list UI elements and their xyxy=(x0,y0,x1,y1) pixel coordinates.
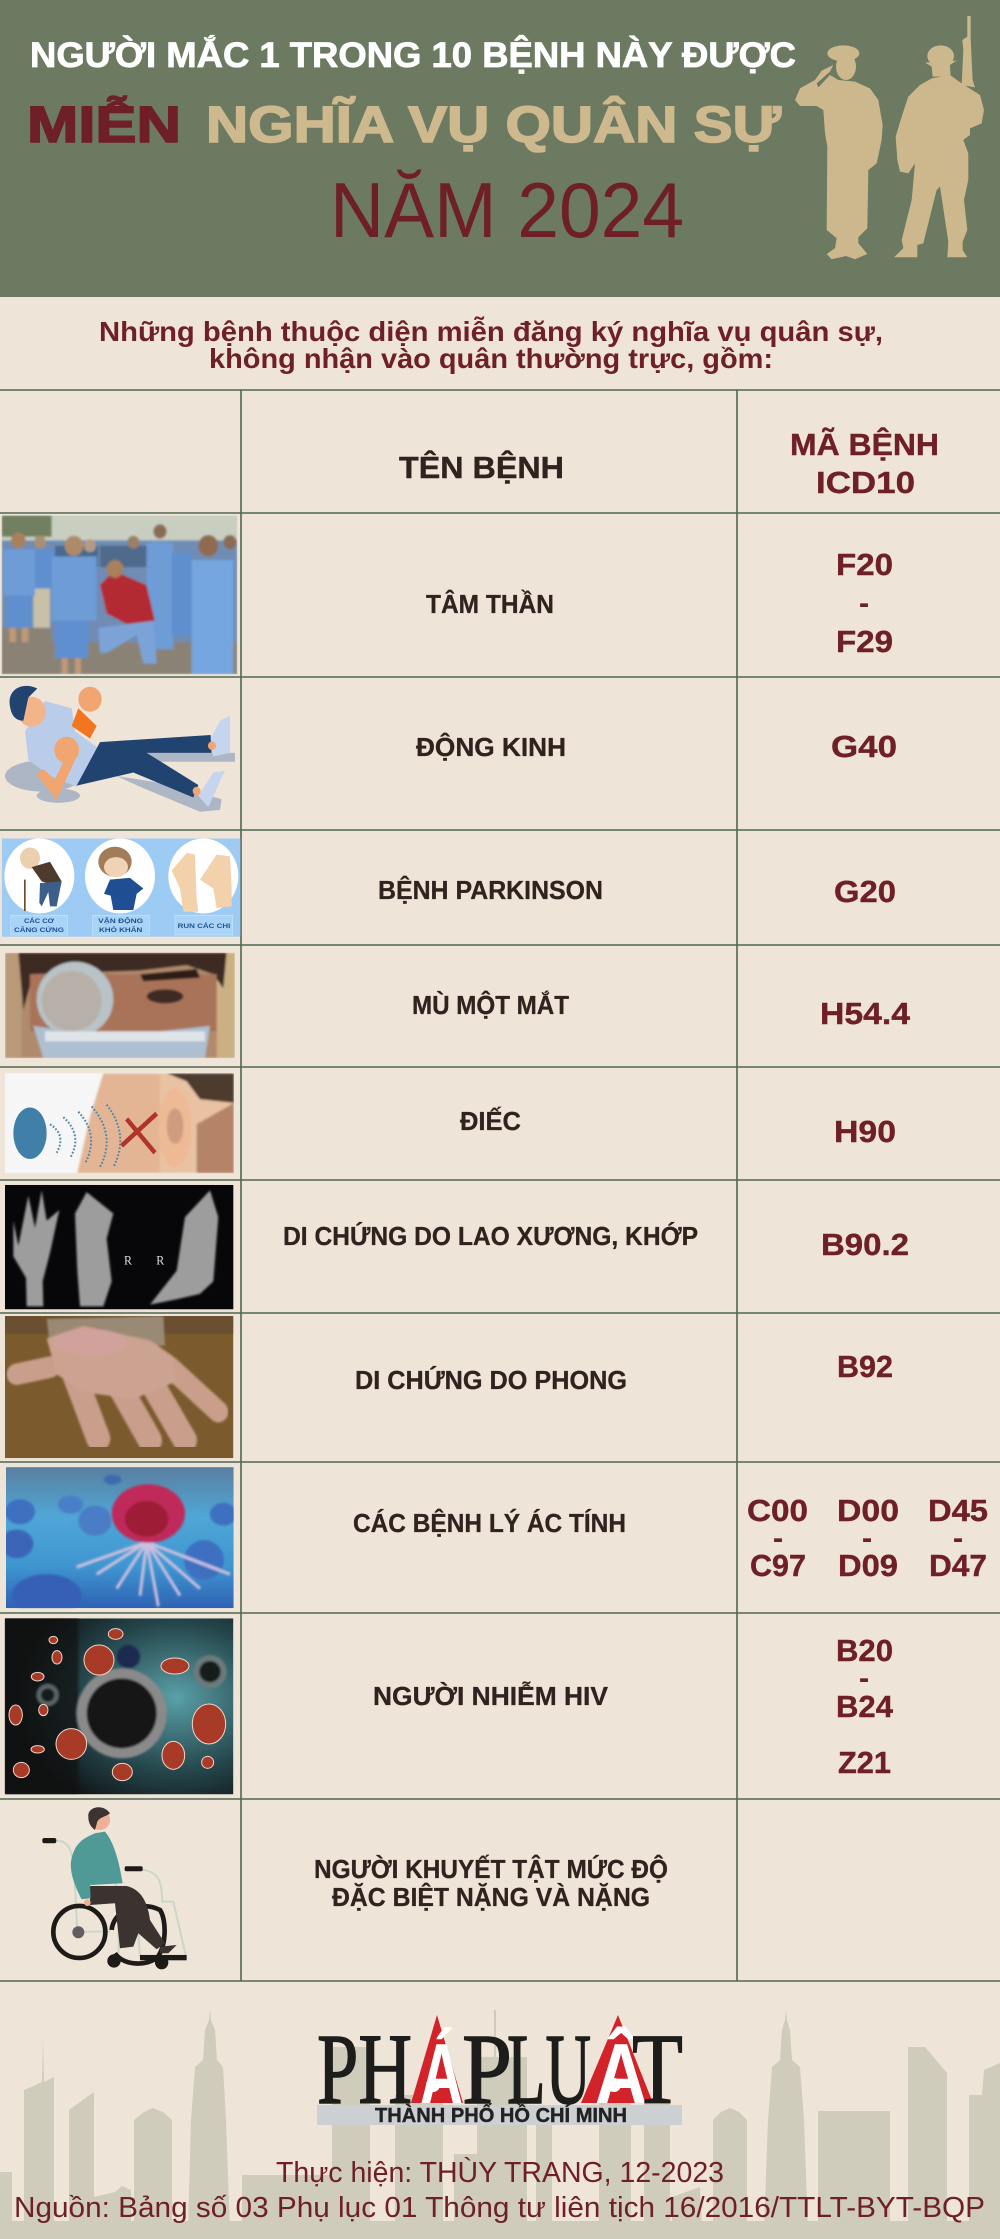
row 9 codes xyxy=(836,1633,894,1780)
image: Parkinson symptoms: CĂNG CỨNG xyxy=(14,925,64,934)
row 8 codes: - xyxy=(773,1520,783,1555)
row 5 code: H90 xyxy=(834,1114,896,1149)
row 6 code: B90.2 xyxy=(821,1227,909,1262)
panel: header banner xyxy=(0,0,1000,297)
icon: saluting soldier silhouette xyxy=(795,45,883,259)
table header: ICD10 code: MÃ BỆNH xyxy=(790,426,939,462)
image: bone tuberculosis X-ray xyxy=(5,1185,233,1309)
row 3 code: G20 xyxy=(834,874,896,909)
row 1 code xyxy=(836,547,893,659)
row 7 code: B92 xyxy=(837,1349,893,1384)
image: Parkinson symptoms: RUN CÁC CHI xyxy=(178,921,231,930)
row 2 label: epilepsy: ĐỘNG KINH xyxy=(416,732,566,762)
image: malignant tumor cell xyxy=(0,1467,237,1617)
row 8 label: malignant diseases: CÁC BỆNH LÝ ÁC TÍNH xyxy=(353,1508,626,1538)
table header: disease name: TÊN BỆNH xyxy=(399,449,564,485)
subtitle text: không nhận vào quân thường trực, gồm: xyxy=(209,343,773,374)
logo: Pháp Luật TP.HCM: Â xyxy=(595,2026,647,2122)
row 4 label: one blind eye: MÙ MỘT MẮT xyxy=(412,990,569,1020)
title line 1: NGƯỜI MẮC 1 TRONG 10 BỆNH NÀY ĐƯỢC xyxy=(30,35,796,75)
image: Parkinson symptoms: CÁC CƠ xyxy=(24,916,54,925)
row 9 codes: Z21 xyxy=(838,1745,891,1780)
row 10 label: severe disability: NGƯỜI KHUYẾT TẬT MỨC ĐỘ xyxy=(314,1854,668,1884)
row 8 codes: D47 xyxy=(929,1548,987,1583)
title line 3: year: NĂM 2024 xyxy=(330,166,684,254)
row 5 label: deaf: ĐIẾC xyxy=(460,1106,521,1136)
image: deaf ear with speaker xyxy=(5,1073,234,1173)
logo: Pháp Luật TP.HCM: P xyxy=(462,2013,512,2125)
logo: Pháp Luật TP.HCM xyxy=(317,2013,683,2127)
image: one blind eye xyxy=(5,953,235,1058)
table header: ICD10 code xyxy=(790,426,939,500)
image: bone tuberculosis X-ray: R xyxy=(124,1253,133,1267)
logo: Pháp Luật TP.HCM: T xyxy=(632,2013,683,2125)
row 7 label: leprosy sequelae: DI CHỨNG DO PHONG xyxy=(355,1365,627,1395)
subtitle text: Những bệnh thuộc diện miễn đăng ký nghĩa vụ quân sự, xyxy=(99,316,883,347)
row 4 code: H54.4 xyxy=(820,996,911,1031)
logo: Pháp Luật TP.HCM: LU xyxy=(507,2013,591,2125)
image: HIV virus and blood cells xyxy=(5,1618,233,1794)
subtitle text xyxy=(99,316,883,374)
row 8 codes: - xyxy=(953,1520,963,1555)
row 10 label: severe disability: ĐẶC BIỆT NẶNG VÀ NẶNG xyxy=(332,1882,650,1912)
title line 2: remainder: NGHĨA VỤ QUÂN SỰ xyxy=(206,95,782,153)
row 1 label: psychiatric: TÂM THẦN xyxy=(426,589,554,619)
row 8 codes: - xyxy=(862,1520,872,1555)
row 8 codes xyxy=(747,1493,988,1583)
row 9 label: HIV: NGƯỜI NHIỄM HIV xyxy=(373,1681,609,1711)
row 6 label: bone tuberculosis sequelae: DI CHỨNG DO LAO XƯƠNG, KHỚP xyxy=(283,1221,698,1251)
image: epilepsy illustration xyxy=(5,686,235,812)
row 8 codes: D09 xyxy=(838,1548,898,1583)
source line: Nguồn: Bảng số 03 Phụ lục 01 Thông tư liên tịch 16/2016/TTLT-BYT-BQP xyxy=(14,2192,985,2224)
skyline background xyxy=(0,2008,1000,2239)
row 9 codes: B24 xyxy=(836,1689,894,1724)
icon: soldier with rifle silhouette xyxy=(894,16,984,257)
image: person in wheelchair xyxy=(42,1807,187,1969)
row 10 label: severe disability xyxy=(314,1854,668,1912)
logo: Pháp Luật TP.HCM: Á xyxy=(420,2027,463,2122)
row 8 codes: C00 xyxy=(747,1493,808,1528)
image: Parkinson symptoms xyxy=(2,839,240,937)
row 8 codes: D45 xyxy=(928,1493,988,1528)
image: Parkinson symptoms: VẬN ĐỘNG xyxy=(98,916,143,925)
row 2 code: G40 xyxy=(831,729,897,764)
row 1 code: F29 xyxy=(836,624,893,659)
title line 2: highlighted word: MIỄN xyxy=(27,95,181,153)
logo: Pháp Luật TP.HCM: THÀNH PHỐ HỒ CHÍ MINH xyxy=(375,2103,627,2127)
image: psychiatric patients xyxy=(2,515,237,674)
image: leprosy hand xyxy=(5,1316,233,1458)
row 3 label: Parkinson: BỆNH PARKINSON xyxy=(378,875,603,905)
row 9 codes: - xyxy=(859,1660,869,1695)
table grid xyxy=(0,390,1000,1981)
image: bone tuberculosis X-ray: R xyxy=(156,1253,165,1267)
row 1 code: - xyxy=(859,585,869,620)
table header: ICD10 code: ICD10 xyxy=(816,465,915,500)
image: Parkinson symptoms: KHÓ KHĂN xyxy=(99,925,143,934)
row 1 code: F20 xyxy=(836,547,893,582)
credit line: Thực hiện: THÙY TRANG, 12-2023 xyxy=(276,2156,724,2189)
row 9 codes: B20 xyxy=(836,1633,893,1668)
row 8 codes: C97 xyxy=(750,1548,806,1583)
logo: Pháp Luật TP.HCM: PH xyxy=(317,2013,412,2125)
row 8 codes: D00 xyxy=(837,1493,899,1528)
